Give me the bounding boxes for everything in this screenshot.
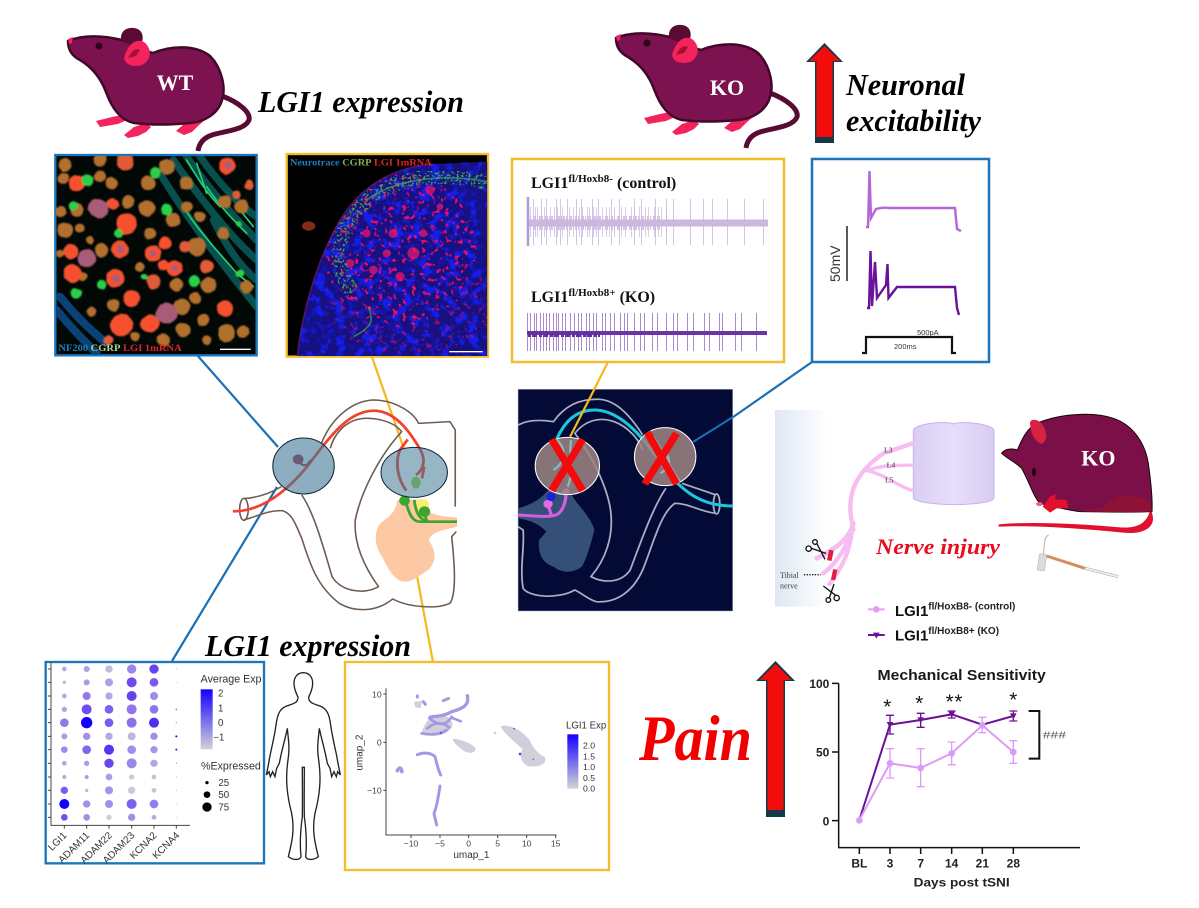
root labels: L5 bbox=[885, 476, 894, 485]
DRG neuron bbox=[293, 454, 311, 465]
WT mouse bbox=[68, 28, 249, 151]
UMAP x tick labels: −10 bbox=[404, 839, 419, 849]
x labels bbox=[851, 856, 1020, 870]
stimulus labels: 500pA bbox=[917, 328, 939, 337]
gray matter bbox=[376, 499, 457, 582]
highlight: silenced DRG circle bbox=[634, 428, 696, 486]
gene labels: KCNA2 bbox=[128, 830, 160, 862]
sciatic nerve branches bbox=[817, 443, 913, 584]
gene labels: ADAM23 bbox=[101, 830, 137, 866]
panel: UMAP bbox=[345, 662, 609, 870]
red cross marks bbox=[552, 432, 677, 491]
scale label: 50mV bbox=[827, 245, 843, 282]
label: KO: (KO) bbox=[616, 289, 655, 306]
background strip bbox=[775, 410, 828, 607]
UMAP x tick labels bbox=[404, 839, 561, 849]
UMAP tick labels: 0 bbox=[377, 738, 382, 748]
UMAP axes bbox=[383, 688, 557, 838]
axes bbox=[832, 683, 1080, 854]
panel: action potential traces bbox=[812, 159, 989, 362]
series: control bbox=[856, 717, 1017, 824]
gene labels: LGI1 bbox=[46, 830, 70, 853]
gene labels: ADAM22 bbox=[79, 830, 115, 866]
label: control: (control) bbox=[613, 175, 676, 192]
KO mouse bbox=[616, 25, 797, 148]
heading: LGI1 expression (bottom): LGI1 expression bbox=[204, 628, 411, 663]
legend: LGI1 Exp: 1.0 bbox=[583, 762, 595, 772]
trace: KO bbox=[527, 332, 767, 334]
yellow terminal bbox=[413, 499, 429, 511]
label: KO: fl/Hoxb8+ bbox=[568, 287, 616, 299]
UMAP x tick labels: 5 bbox=[495, 839, 500, 849]
spinal cord outline bbox=[240, 400, 456, 610]
UMAP bright cells bbox=[440, 728, 534, 760]
UMAP tick labels: −10 bbox=[367, 786, 382, 796]
bracket and hash marks: ### bbox=[1043, 731, 1066, 742]
heading: Pain: Pain bbox=[638, 703, 752, 775]
label: control: LGI1 bbox=[531, 175, 568, 192]
tibial nerve label bbox=[780, 571, 821, 591]
UMAP clusters purple bbox=[397, 696, 468, 825]
legend: LGI1 Exp: LGI1 Exp bbox=[566, 721, 606, 732]
UMAP axis titles: umap_1 bbox=[453, 850, 490, 861]
UMAP axis titles bbox=[355, 734, 490, 861]
label: KO: LGI1 bbox=[531, 289, 568, 306]
highlight: dorsal horn circle bbox=[381, 447, 447, 497]
WT label: WT bbox=[157, 70, 194, 95]
stimulus labels bbox=[894, 328, 939, 351]
highlight: DRG circle bbox=[273, 438, 334, 494]
scale bar bbox=[449, 351, 483, 352]
green motor neurons bbox=[401, 477, 457, 522]
significance stars: * bbox=[915, 692, 923, 715]
UMAP tick labels: 10 bbox=[372, 689, 382, 699]
panel: dot plot bbox=[46, 662, 340, 866]
trace: KO action potential bbox=[867, 251, 959, 315]
UMAP x tick labels: −5 bbox=[435, 839, 445, 849]
significance stars: * bbox=[883, 695, 891, 718]
root labels: L3 bbox=[884, 445, 893, 454]
heading: Neuronal excitability: Neuronal bbox=[845, 67, 965, 102]
scale bar bbox=[220, 349, 251, 350]
icon: human body bbox=[266, 673, 340, 859]
panel: spontaneous firing traces bbox=[512, 159, 784, 362]
connector overlaps bbox=[570, 382, 733, 442]
root labels: L4 bbox=[887, 461, 895, 470]
x axis title: Days post tSNI bbox=[914, 876, 1010, 890]
panel: DRG micrograph bbox=[54, 153, 257, 355]
cyan nerve bbox=[557, 410, 733, 506]
axes bbox=[48, 663, 190, 829]
stimulus labels: 200ms bbox=[894, 342, 917, 351]
y labels: 100 bbox=[809, 677, 830, 691]
x labels: BL bbox=[851, 856, 867, 870]
legend: average expression: 0 bbox=[218, 718, 223, 729]
LGI1 red signal bbox=[323, 173, 477, 327]
y labels bbox=[809, 677, 830, 828]
UMAP x tick labels: 15 bbox=[551, 839, 561, 849]
x labels: 14 bbox=[945, 856, 959, 870]
legend: LGI1 Exp: 0.0 bbox=[583, 784, 595, 794]
stain key: Neurotrace CGRP LGI 1mRNA bbox=[290, 158, 432, 168]
legend: KO bbox=[868, 626, 999, 645]
KO rat bbox=[999, 414, 1153, 533]
trace: control action potential bbox=[866, 171, 961, 231]
bracket and hash marks bbox=[1029, 711, 1066, 759]
expression dots bbox=[59, 664, 177, 821]
panel: spinal cord micrograph bbox=[287, 154, 497, 357]
legend: LGI1 Exp: 2.0 bbox=[583, 740, 595, 750]
heading: LGI1 expression (top): LGI1 expression bbox=[257, 84, 464, 119]
red sensory nerve bbox=[233, 411, 424, 511]
arrow: up, pain bbox=[756, 661, 795, 817]
legend: percent expressed bbox=[201, 761, 261, 813]
UMAP tick labels bbox=[367, 689, 382, 796]
stain key: NF200 CGRP LGI 1mRNA bbox=[58, 343, 182, 353]
nerve inside circles bbox=[553, 437, 680, 487]
y labels: 50 bbox=[816, 746, 830, 760]
significance stars: ** bbox=[946, 691, 963, 714]
root labels bbox=[884, 445, 895, 485]
legend: control: fl/HoxB8- (control) bbox=[928, 601, 1015, 612]
nerve fibres bbox=[57, 157, 257, 353]
legend: average expression: 2 bbox=[218, 689, 223, 700]
CGRP green band bbox=[339, 177, 490, 292]
legend: average expression: Average Exp bbox=[201, 674, 262, 686]
KO label: KO bbox=[1081, 445, 1115, 470]
scissors bbox=[806, 540, 839, 602]
gene labels: ADAM11 bbox=[57, 830, 92, 866]
KO label: KO bbox=[710, 75, 744, 100]
UMAP x tick labels: 10 bbox=[522, 839, 532, 849]
chart: mechanical sensitivity bbox=[809, 668, 1080, 890]
significance stars: * bbox=[1009, 689, 1017, 712]
legend: LGI1 Exp: 1.5 bbox=[583, 751, 595, 761]
heading: Neuronal excitability bbox=[845, 67, 981, 138]
gray matter bbox=[518, 490, 594, 572]
x labels: 21 bbox=[976, 856, 989, 870]
legend: percent expressed: 25 bbox=[218, 778, 229, 789]
legend: percent expressed: 50 bbox=[218, 790, 229, 801]
UMAP axis titles: umap_2 bbox=[355, 734, 366, 771]
gene labels bbox=[46, 830, 182, 866]
legend: average expression bbox=[201, 674, 262, 749]
significance stars bbox=[883, 689, 1017, 718]
lumbar spinal cord bbox=[913, 423, 994, 505]
legend: average expression: 1 bbox=[218, 703, 223, 714]
UMAP x tick labels: 0 bbox=[466, 839, 471, 849]
legend: KO: LGI1 bbox=[895, 628, 928, 645]
diagram: KO spinal cord (dark) bbox=[518, 389, 733, 611]
tibial nerve label: Tibial bbox=[780, 571, 800, 580]
x labels: 28 bbox=[1007, 856, 1020, 870]
highlight: silenced dorsal horn circle bbox=[535, 437, 599, 495]
label: control: fl/Hoxb8- bbox=[568, 173, 613, 185]
legend: KO: fl/HoxB8+ (KO) bbox=[928, 626, 999, 637]
connector lines bbox=[172, 355, 812, 662]
legend: control bbox=[868, 601, 1015, 620]
legend: percent expressed: %Expressed bbox=[201, 761, 261, 773]
y labels: 0 bbox=[823, 814, 830, 828]
heading: Neuronal excitability: excitability bbox=[846, 103, 981, 138]
cut marks bbox=[827, 550, 837, 580]
legend: LGI1 Exp bbox=[566, 721, 606, 794]
x labels: 3 bbox=[887, 856, 894, 870]
series: KO bbox=[859, 711, 1017, 820]
scale bar 50mV bbox=[846, 226, 848, 281]
tibial nerve label: nerve bbox=[780, 582, 798, 591]
legend: LGI1 Exp: 0.5 bbox=[583, 773, 595, 783]
cell bodies bbox=[54, 153, 254, 347]
trace: control bbox=[527, 197, 768, 246]
arrow: up, neuronal excitability bbox=[806, 43, 843, 143]
legend: control: LGI1 bbox=[895, 603, 928, 620]
von Frey filament bbox=[1037, 535, 1118, 577]
chart title: Mechanical Sensitivity bbox=[877, 668, 1047, 684]
legend: average expression: −1 bbox=[213, 732, 224, 743]
gene labels: KCNA4 bbox=[151, 830, 182, 862]
x labels: 7 bbox=[917, 856, 924, 870]
stimulus step bbox=[862, 337, 956, 353]
magenta neurons bbox=[518, 488, 569, 516]
spinal cord outline bbox=[518, 399, 720, 602]
UMAP clusters grey bbox=[414, 701, 545, 767]
heading: Nerve injury: Nerve injury bbox=[875, 534, 1000, 559]
diagram: WT spinal cord and DRG bbox=[233, 400, 457, 610]
diagram: nerve injury model bbox=[775, 410, 1153, 645]
legend: percent expressed: 75 bbox=[218, 802, 229, 813]
